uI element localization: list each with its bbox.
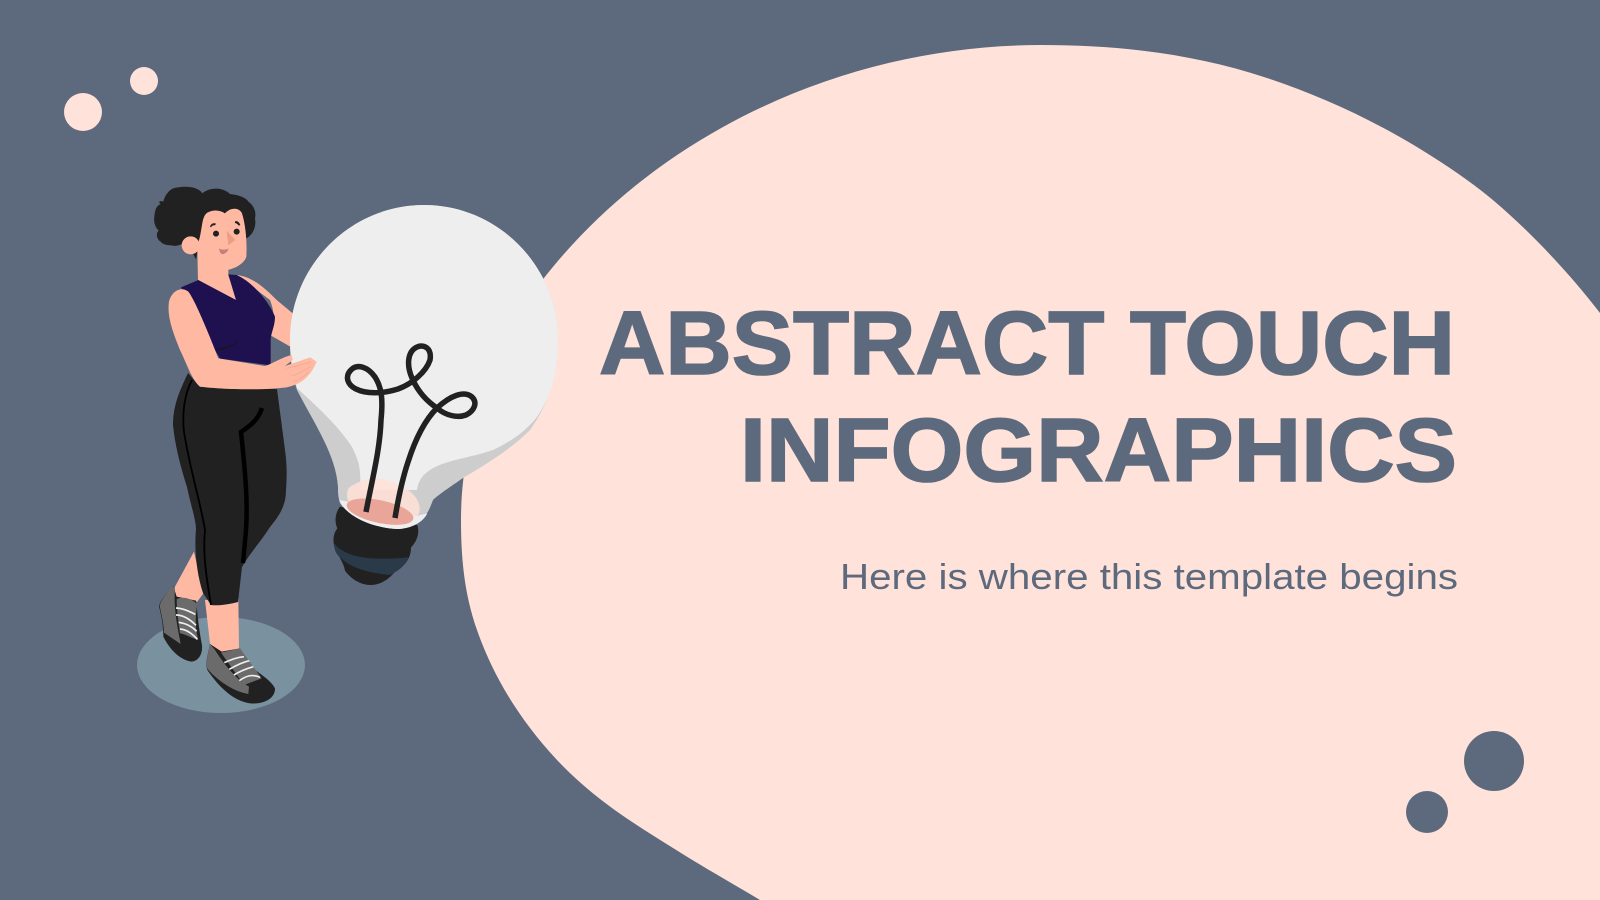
torso and head bbox=[154, 187, 317, 389]
trousers bbox=[173, 373, 287, 605]
nose bbox=[227, 231, 235, 245]
floor shadow disc bbox=[137, 617, 305, 713]
title: INFOGRAPHICS bbox=[740, 401, 1457, 501]
back arm bbox=[237, 275, 297, 348]
decorative dots bottom right bbox=[1406, 731, 1524, 833]
peach blob panel bbox=[461, 45, 1600, 900]
face bbox=[197, 209, 247, 271]
back leg bbox=[159, 552, 203, 662]
bulb rim bbox=[339, 500, 427, 529]
top fold bbox=[216, 339, 240, 351]
bulb glass shadow bbox=[290, 205, 558, 529]
subtitle: Here is where this template begins bbox=[840, 556, 1458, 597]
bulb base bbox=[333, 507, 418, 585]
front arm and hand bbox=[169, 289, 317, 389]
title bbox=[599, 294, 1457, 501]
ear bbox=[182, 236, 200, 254]
illustration: woman holding light bulb bbox=[137, 187, 558, 713]
mouth bbox=[219, 248, 229, 254]
title: ABSTRACT TOUCH bbox=[599, 294, 1455, 394]
bulb glass highlight bbox=[290, 205, 558, 490]
front shoe bbox=[207, 644, 275, 704]
decorative dots top left bbox=[64, 67, 158, 131]
eyes and brows bbox=[210, 221, 240, 237]
filament bbox=[347, 346, 475, 518]
neck bbox=[197, 250, 236, 300]
front leg bbox=[205, 598, 275, 704]
light bulb bbox=[290, 205, 558, 585]
finger lines bbox=[287, 362, 311, 382]
back shoe bbox=[159, 586, 202, 662]
bulb glow bbox=[347, 479, 420, 520]
tank top bbox=[181, 274, 275, 365]
bulb socket opening bbox=[344, 494, 416, 530]
hair bbox=[154, 187, 255, 259]
